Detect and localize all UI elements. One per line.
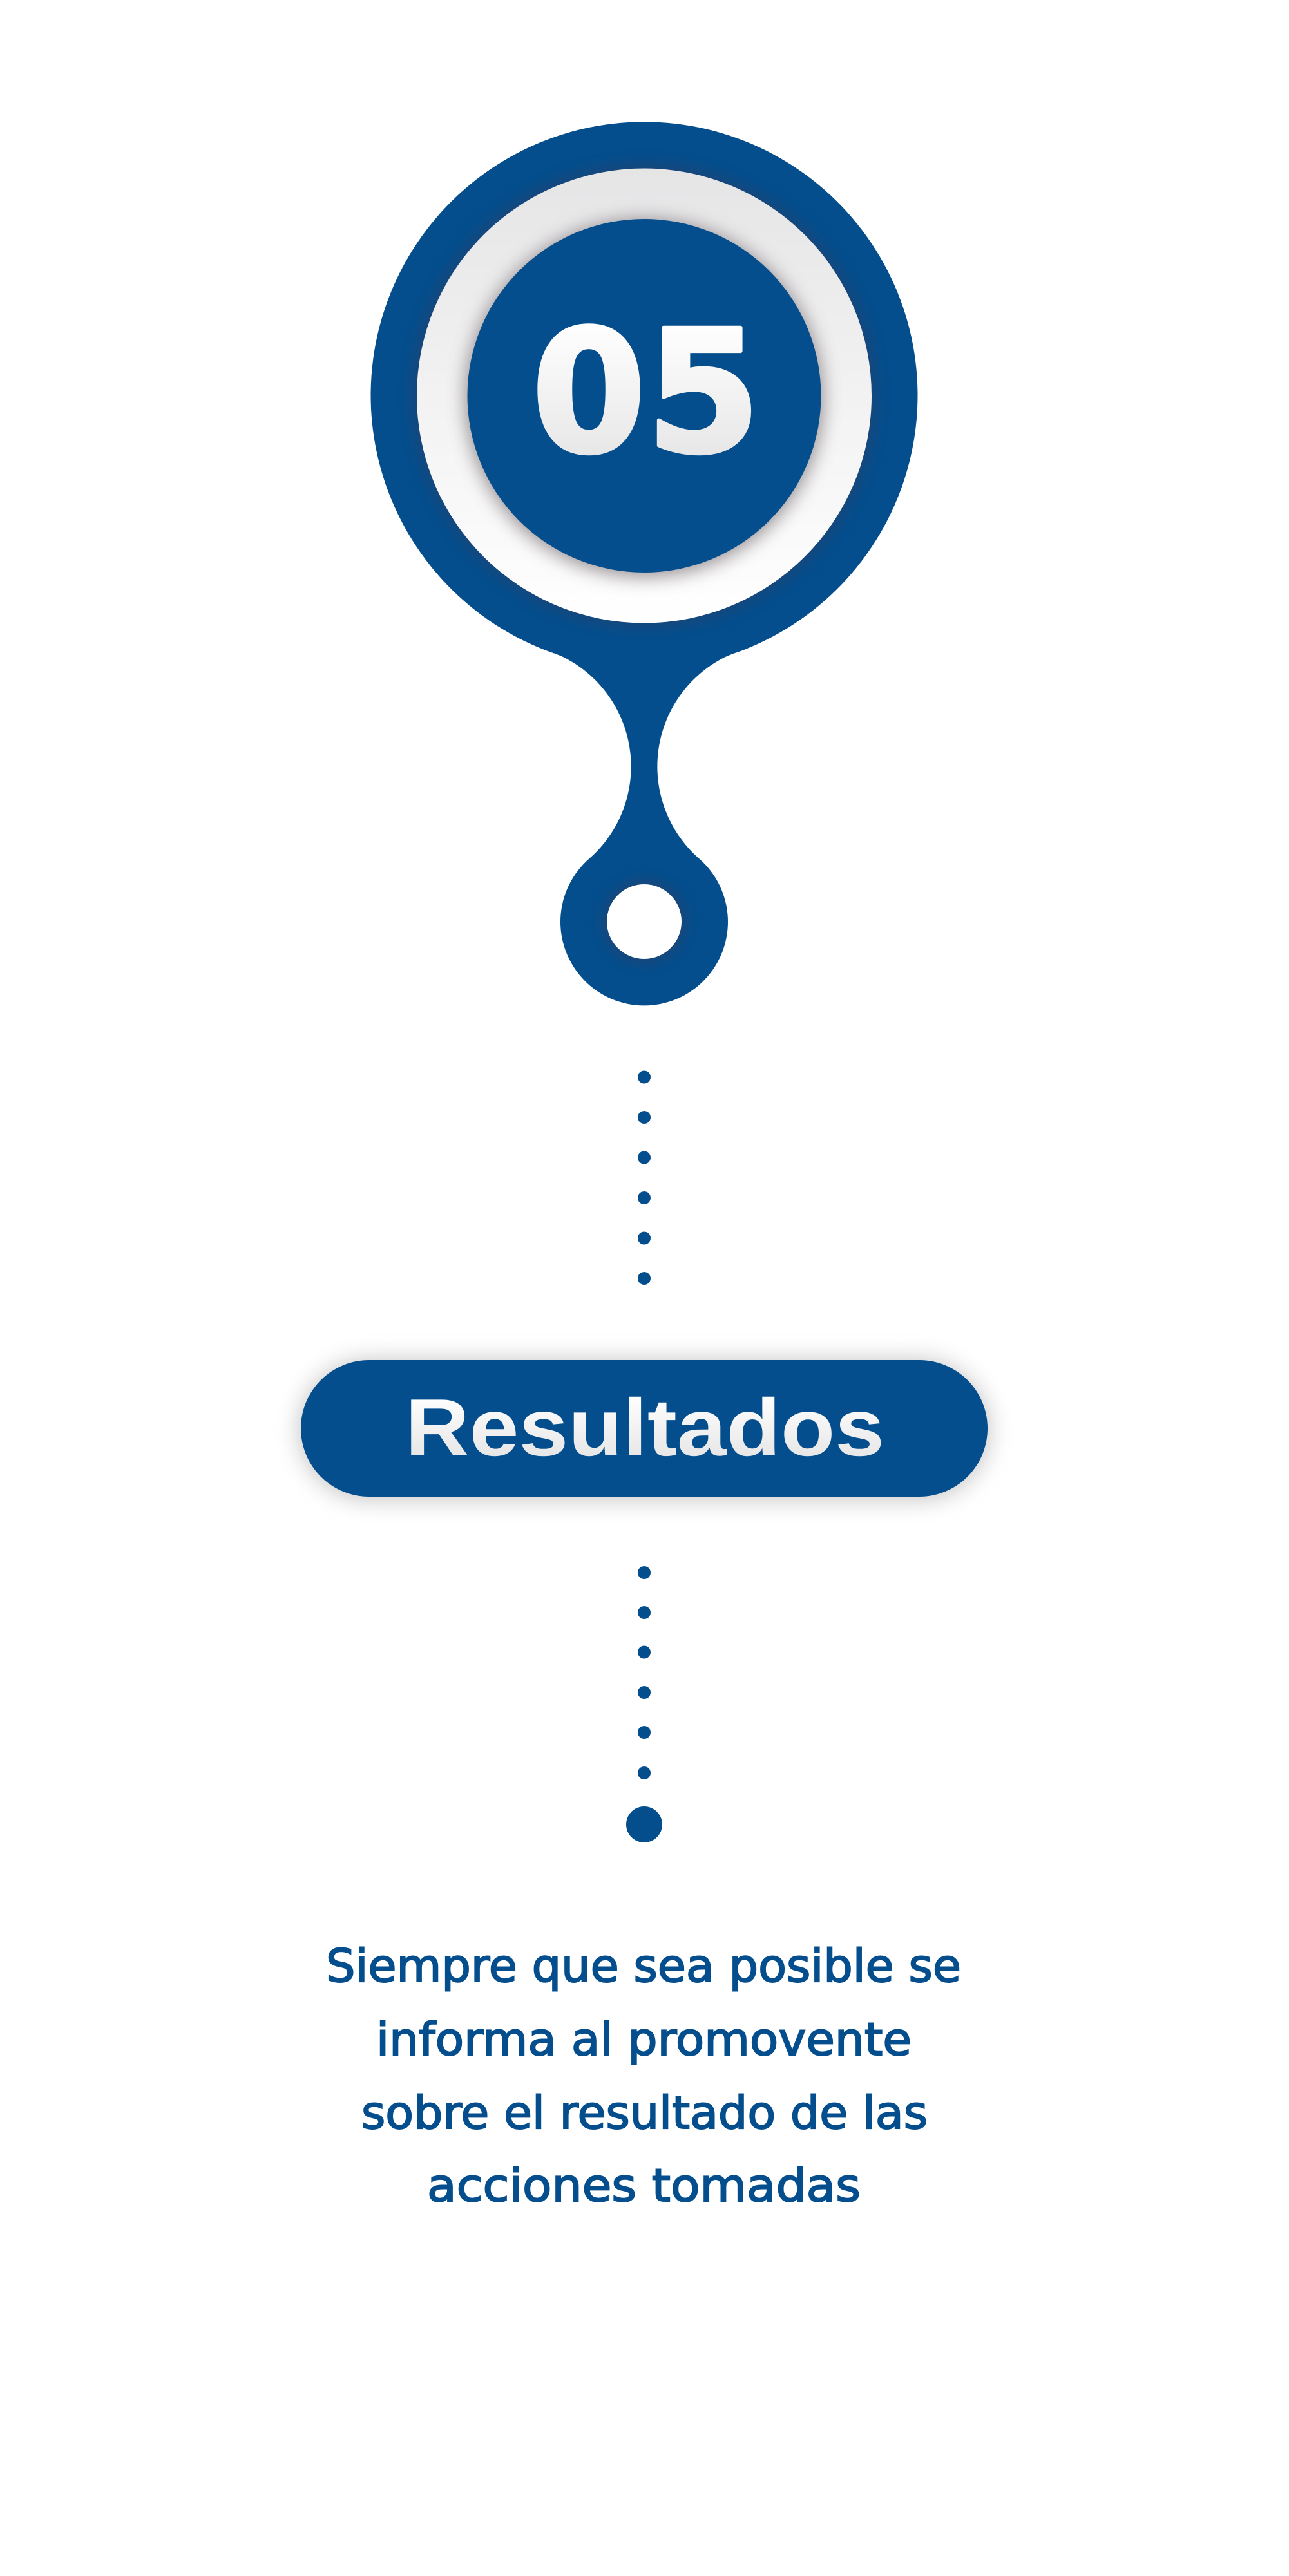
inner circle shadow xyxy=(465,219,823,577)
pill shadow xyxy=(300,1360,989,1499)
dotted connector lower xyxy=(638,1566,651,1779)
ring glow xyxy=(415,166,874,625)
title pill xyxy=(300,1360,989,1499)
inner blue circle xyxy=(468,219,821,573)
lower white hole xyxy=(607,884,682,959)
end dot xyxy=(626,1806,662,1842)
title text: Resultados xyxy=(405,1382,884,1473)
number 05: 05 xyxy=(531,295,761,492)
pin marker with number 05 xyxy=(371,122,917,1005)
dotted connector upper xyxy=(638,1070,651,1285)
description text: sobre el resultado de las xyxy=(361,2087,928,2139)
description text: acciones tomadas xyxy=(427,2159,861,2212)
pin body xyxy=(371,122,917,1005)
pill background xyxy=(301,1360,988,1497)
lower hole glow xyxy=(604,882,684,961)
description text: Siempre que sea posible se xyxy=(326,1940,961,1993)
description text xyxy=(326,1940,961,2212)
description text: informa al promovente xyxy=(376,2013,912,2066)
white ring xyxy=(417,169,872,623)
